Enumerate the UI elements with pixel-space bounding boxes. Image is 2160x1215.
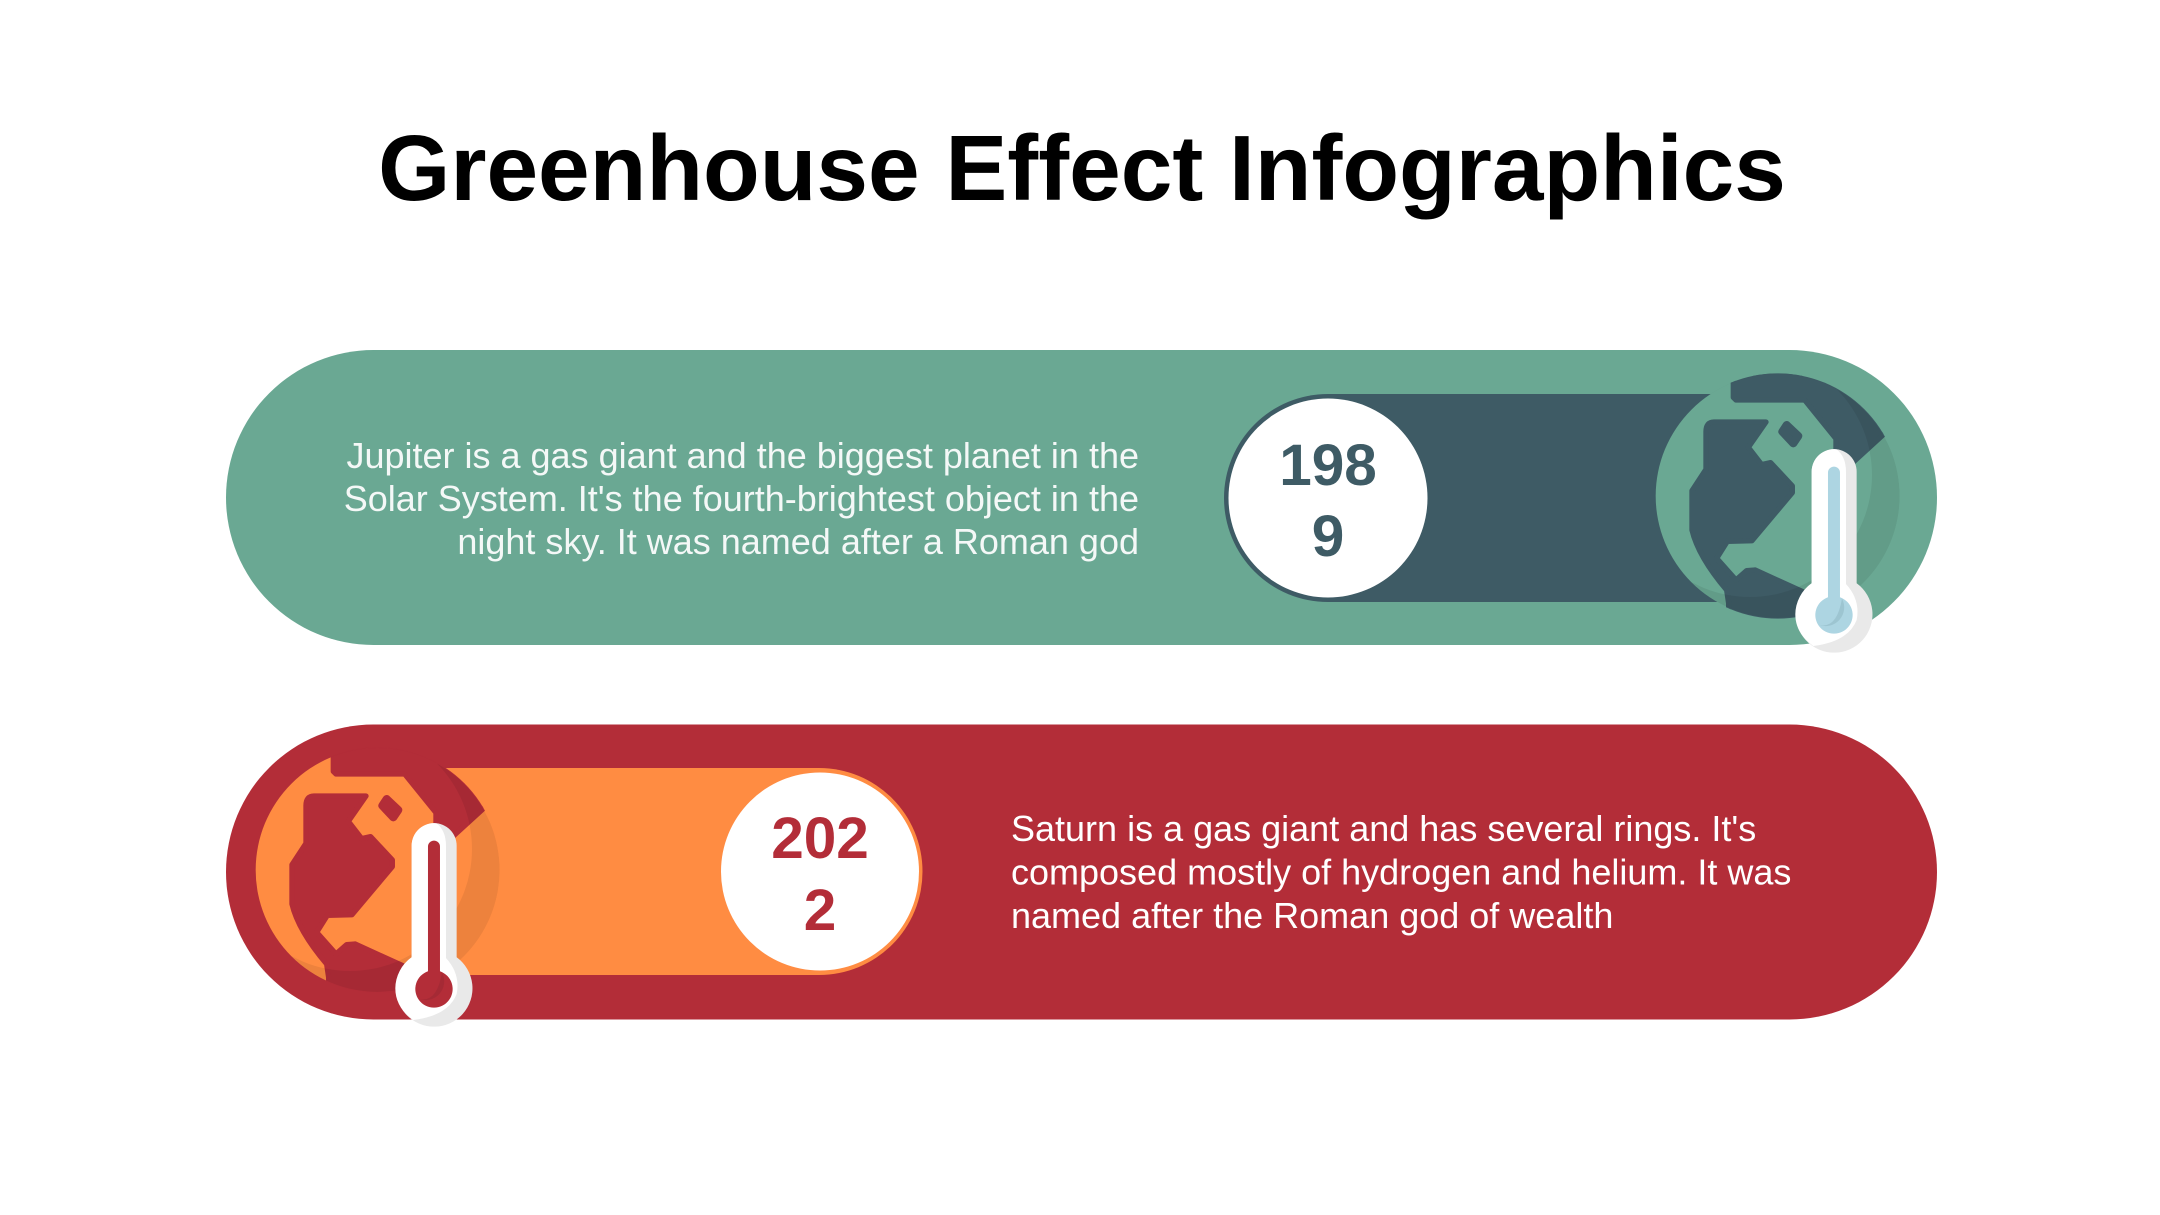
panel: Jupiter 1989 xyxy=(226,350,1937,653)
description text: night sky. It was named after a Roman god xyxy=(457,521,1139,562)
description text: Solar System. It's the fourth-brightest object in the xyxy=(344,478,1139,519)
timeline bar xyxy=(1224,394,1780,602)
title: Greenhouse Effect Infographics xyxy=(378,116,1786,220)
panel background pill xyxy=(226,724,1937,1020)
icon: thermometer xyxy=(395,823,472,1027)
year circle xyxy=(721,772,919,970)
description text xyxy=(1011,808,1791,936)
icon: earth xyxy=(256,758,500,992)
year label xyxy=(771,806,869,943)
timeline bar xyxy=(378,768,923,975)
description text: named after the Roman god of wealth xyxy=(1011,895,1613,936)
panel: Saturn 2022 xyxy=(226,724,1937,1027)
description text: composed mostly of hydrogen and helium. It was xyxy=(1011,852,1791,892)
description text xyxy=(344,435,1139,562)
year circle xyxy=(1228,398,1428,598)
year label: 9 xyxy=(1312,504,1344,569)
description text: Jupiter is a gas giant and the biggest planet in the xyxy=(346,435,1139,476)
icon: earth xyxy=(1656,373,1900,619)
year label: 2 xyxy=(804,878,836,943)
icon: thermometer xyxy=(1795,449,1872,653)
year label: 198 xyxy=(1279,433,1377,498)
year label xyxy=(1279,433,1377,569)
description text: Saturn is a gas giant and has several rings. It's xyxy=(1011,808,1756,849)
panel background pill xyxy=(226,350,1937,645)
year label: 202 xyxy=(771,806,869,871)
